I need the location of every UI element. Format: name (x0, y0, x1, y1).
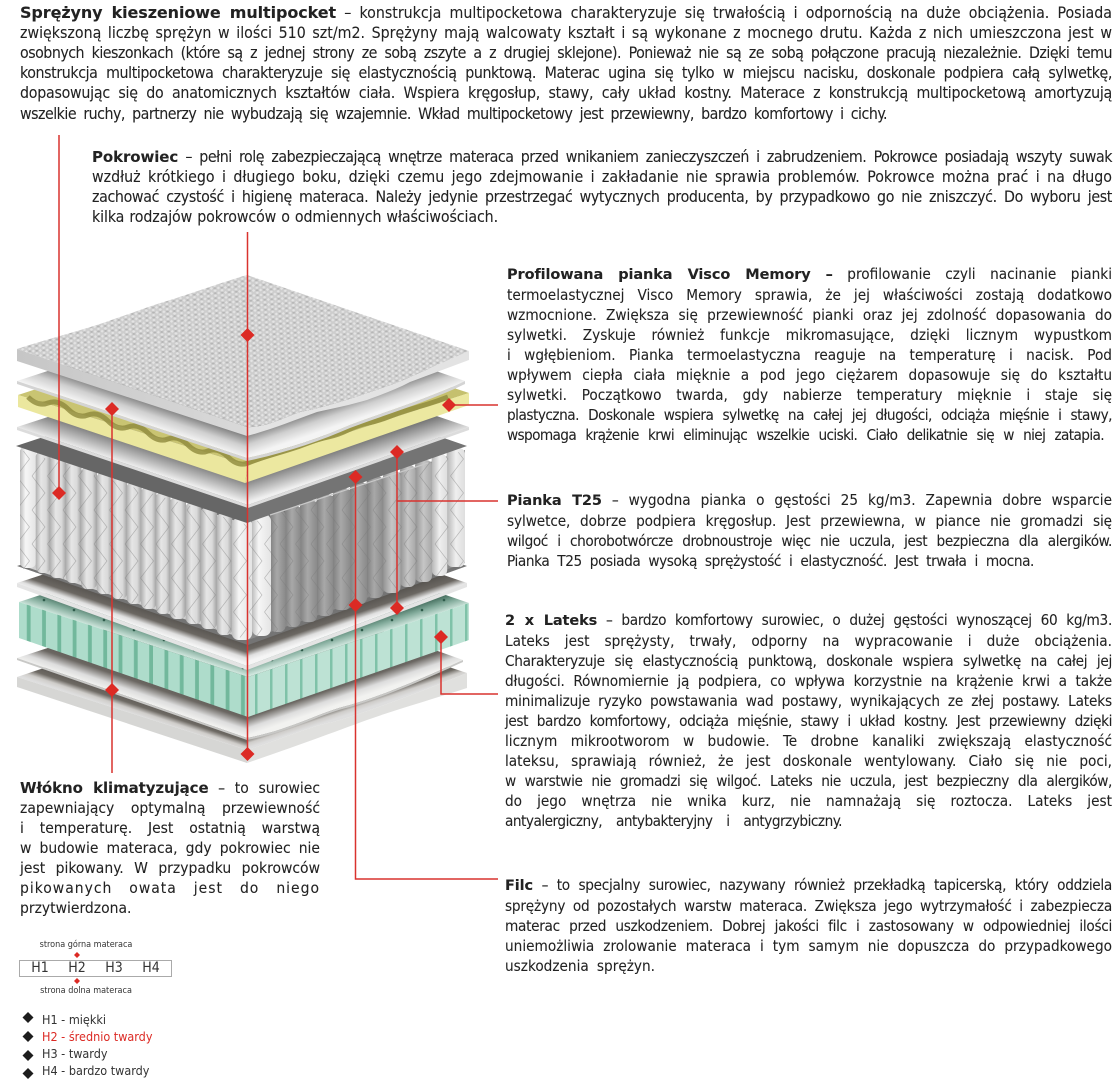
text block: cover: kilka rodzajów pokrowców o odmiennych właściwościach. (92, 206, 498, 226)
text block: latex: w warstwie nie gromadzi się wilgoć. Lateks nie uczula, jest bezpieczny dla alergików, (505, 772, 1112, 790)
layer: lower white felt (17, 583, 463, 740)
layer: quilted cover (17, 275, 469, 436)
callout: cover line (52, 135, 66, 500)
text block: cover: Pokrowiec – pełni rolę zabezpieczającą wnętrze materaca przed wnikaniem zanieczyszczeń i zabrudzeniem. Pokrowce posiadają wszyty suwak (92, 146, 1112, 166)
text block: felt: uniemożliwia zrolowanie materaca i tym samym nie dopuszcza do przypadkowego (505, 937, 1112, 955)
text block: T25 foam (507, 491, 1112, 570)
text block: latex (504, 611, 1112, 830)
springs: left face columns (20, 446, 232, 635)
legend item: H4: H4 - bardzo twardy (42, 1063, 149, 1078)
layer: T25 foam sheet (17, 352, 469, 508)
text block: T25 foam: wilgoć i chorobotwórcze drobnoustroje więc nie uczula, jest bezpieczna dla alergików. (507, 532, 1112, 550)
text block: latex: antyalergiczny, antybakteryjny i antygrzybiczny. (505, 812, 842, 830)
springs: front corner column (232, 514, 271, 640)
callout: climate fibre line (105, 402, 119, 773)
text block: climate fibre: i temperaturę. Jest ostatnią warstwą (20, 819, 320, 837)
legend: hardness scale frame and markers (20, 952, 172, 984)
legend label: top side: strona górna materaca (40, 940, 132, 950)
text block: visco memory foam: sylwetki. Początkowo twarda, gdy nabierze temperatury mięknie i staje się (507, 386, 1112, 404)
text block: pocket springs: osobnych kieszonkach (które są z jednej strony ze sobą zszyte a z drugiej sklejone). Ponieważ nie są ze sobą połączone pracują niezależnie. Dzięki temu (20, 43, 1112, 62)
text block: visco memory foam: wzmocnione. Zwiększa się przewiewność pianki oraz jej zdolność dopasowania do (507, 306, 1112, 324)
text block: visco memory foam: plastyczna. Doskonale wspiera sylwetkę na całej jej długości, odciąża mięśnie i stawy, (507, 406, 1112, 424)
text block: pocket springs: Sprężyny kieszeniowe multipocket – konstrukcja multipocketowa charakteryzuje się trwałością i odpornością na duże obciążenia. Posiada (20, 2, 1112, 22)
text block: felt: sprężyny od pozostałych warstw materaca. Zwiększa jego wytrzymałość i zabezpiecza (505, 897, 1112, 915)
text block: visco memory foam: Profilowana pianka Visco Memory – profilowanie czyli nacinanie pianki (507, 265, 1112, 283)
text block: pocket springs (20, 2, 1112, 123)
text block: climate fibre: jest pikowany. W przypadku pokrowców (20, 859, 320, 877)
text block: visco memory foam: wspomaga krążenie krwi eliminując wszelkie uciski. Ciało delikatnie się w niej zatapia. (507, 426, 1104, 444)
text block: felt (505, 876, 1112, 975)
text block: latex: licznym mikrootworom w budowie. Te drobne kanaliki zwiększają elastyczność (505, 732, 1112, 750)
text block: cover: wzdłuż krótkiego i długiego boku, dzięki czemu jego zdejmowanie i zakładanie nie sprawia problemów. Pokrowce można prać i na długo (92, 166, 1112, 186)
layer: spring top felt (16, 370, 467, 523)
text block: latex: Charakteryzuje się elastycznością punktową, doskonale wspiera sylwetkę na całej jej (505, 652, 1112, 670)
legend label: bottom side: strona dolna materaca (40, 986, 132, 996)
text block: climate fibre: pikowanych owata jest do niego (20, 879, 320, 897)
legend item: H3: H3 - twardy (42, 1046, 108, 1061)
legend label: H3: H3 (105, 960, 123, 976)
text block: visco memory foam: termoelastycznej Visco Memory sprawia, że jej właściwości zostają dodatkowo (507, 286, 1112, 304)
text block: visco memory foam: i wgłębieniom. Pianka termoelastyczna reaguje na temperaturę i nacisk. Pod (507, 346, 1112, 364)
layer: climate fibre bottom (17, 600, 467, 763)
legend label: H1: H1 (31, 960, 49, 976)
layer: upper white sheet (17, 306, 465, 461)
text block: latex: minimalizuje ryzyko powstawania wad postawy, wynikających ze złej postawy. Lateks (505, 692, 1112, 710)
text block: latex: do jego wnętrza nie wnika kurz, nie namnażają się roztocza. Lateks jest (505, 792, 1112, 810)
text block: pocket springs: wszelkie ruchy, partnerzy nie wybudzają się wzajemnie. Wkład multipocketowy jest przewiewny, bardzo komfortowy i cichy. (20, 104, 887, 123)
callout: visco memory line (442, 398, 498, 412)
legend item: H2: H2 - średnio twardy (42, 1029, 152, 1044)
text block: latex: długości. Równomiernie ją podpiera, co wpływa korzystnie na krążenie krwi a także (505, 672, 1112, 690)
text block: pocket springs: konstrukcja multipocketowa charakteryzuje się elastycznością punktową. Materac ugina się tylko w miejscu nacisku, doskonale podpiera całą sylwetkę, (20, 63, 1112, 82)
text block: latex: Lateks jest sprężysty, trwały, odporny na wypracowanie i duże obciążenia. (505, 632, 1112, 650)
layer: felt under springs (17, 508, 467, 670)
text block: T25 foam: sylwetce, dobrze podpiera kręgosłup. Jest przewiewna, w piance nie gromadzi się (507, 512, 1112, 530)
legend: list bullets (22, 1012, 34, 1079)
text block: pocket springs: dopasowując się do anatomicznych kształtów ciała. Wspiera kręgosłup, stawy, cały układ kostny. Materace z konstrukcją multipocketową amortyzują (20, 83, 1112, 102)
callout: felt line (348, 470, 498, 879)
layer: profiled visco memory foam (18, 320, 469, 483)
text block: felt: uszkodzenia sprężyn. (505, 957, 655, 975)
text block: visco memory foam (507, 265, 1112, 444)
callout: T25 foam line (390, 445, 498, 615)
text block: cover (92, 146, 1112, 226)
text block: felt: materac przed uszkodzeniem. Dobrej jakości filc i zastosowany w odpowiedniej ilości (505, 917, 1112, 935)
text block: visco memory foam: sylwetki. Zyskuje również funkcje mikromasujące, dzięki licznym wypustkom (507, 326, 1112, 344)
text block: latex: jest bardzo komfortowy, odciąża mięśnie, stawy i układ kostny. Jest przewiewny dzięki (505, 712, 1112, 730)
layer: pocket springs (17, 446, 467, 645)
callout: cover centre line (240, 232, 254, 761)
layer: latex block (19, 527, 469, 717)
text block: felt: Filc – to specjalny surowiec, nazywany również przekładką tapicerską, który oddziela (505, 876, 1112, 894)
text block: climate fibre: przytwierdzona. (20, 899, 131, 917)
text block: climate fibre: zapewniający optymalną przewiewność (20, 799, 320, 817)
text block: pocket springs: zwiększoną liczbę sprężyn w ilości 510 szt/m2. Sprężyny mają walcowaty kształt i są wykonane z mocnego drutu. Każda z nich umieszczona jest w (20, 23, 1112, 42)
legend label: H4: H4 (142, 960, 160, 976)
text block: visco memory foam: wpływem ciepła ciała mięknie a pod jego ciężarem dopasowuje się do kształtu (507, 366, 1112, 384)
text block: latex: lateksu, sprawiają również, że jest doskonale wentylowany. Ciało się nie poci, (505, 752, 1112, 770)
text block: cover: zachować czystość i higienę materaca. Należy jedynie przestrzegać wytycznych producenta, by przypadkowo go nie zniszczyć. Do wyboru jest (92, 186, 1112, 206)
springs: right face columns (270, 448, 465, 632)
text block: climate fibre: Włókno klimatyzujące – to surowiec (20, 779, 320, 797)
text block: T25 foam: Pianka T25 – wygodna pianka o gęstości 25 kg/m3. Zapewnia dobre wsparcie (507, 491, 1112, 509)
text block: T25 foam: Pianka T25 posiada wysoką sprężystość i elastyczność. Jest trwała i mocna. (507, 552, 1034, 570)
callout: latex line (434, 630, 498, 694)
text block: climate fibre (20, 779, 320, 917)
text block: climate fibre: w budowie materaca, gdy pokrowiec nie (20, 839, 320, 857)
text block: latex: 2 x Lateks – bardzo komfortowy surowiec, o dużej gęstości wynoszącej 60 kg/m3. (505, 611, 1112, 629)
legend item: H1: H1 - miękki (42, 1012, 106, 1027)
legend label: H2: H2 (68, 960, 86, 976)
